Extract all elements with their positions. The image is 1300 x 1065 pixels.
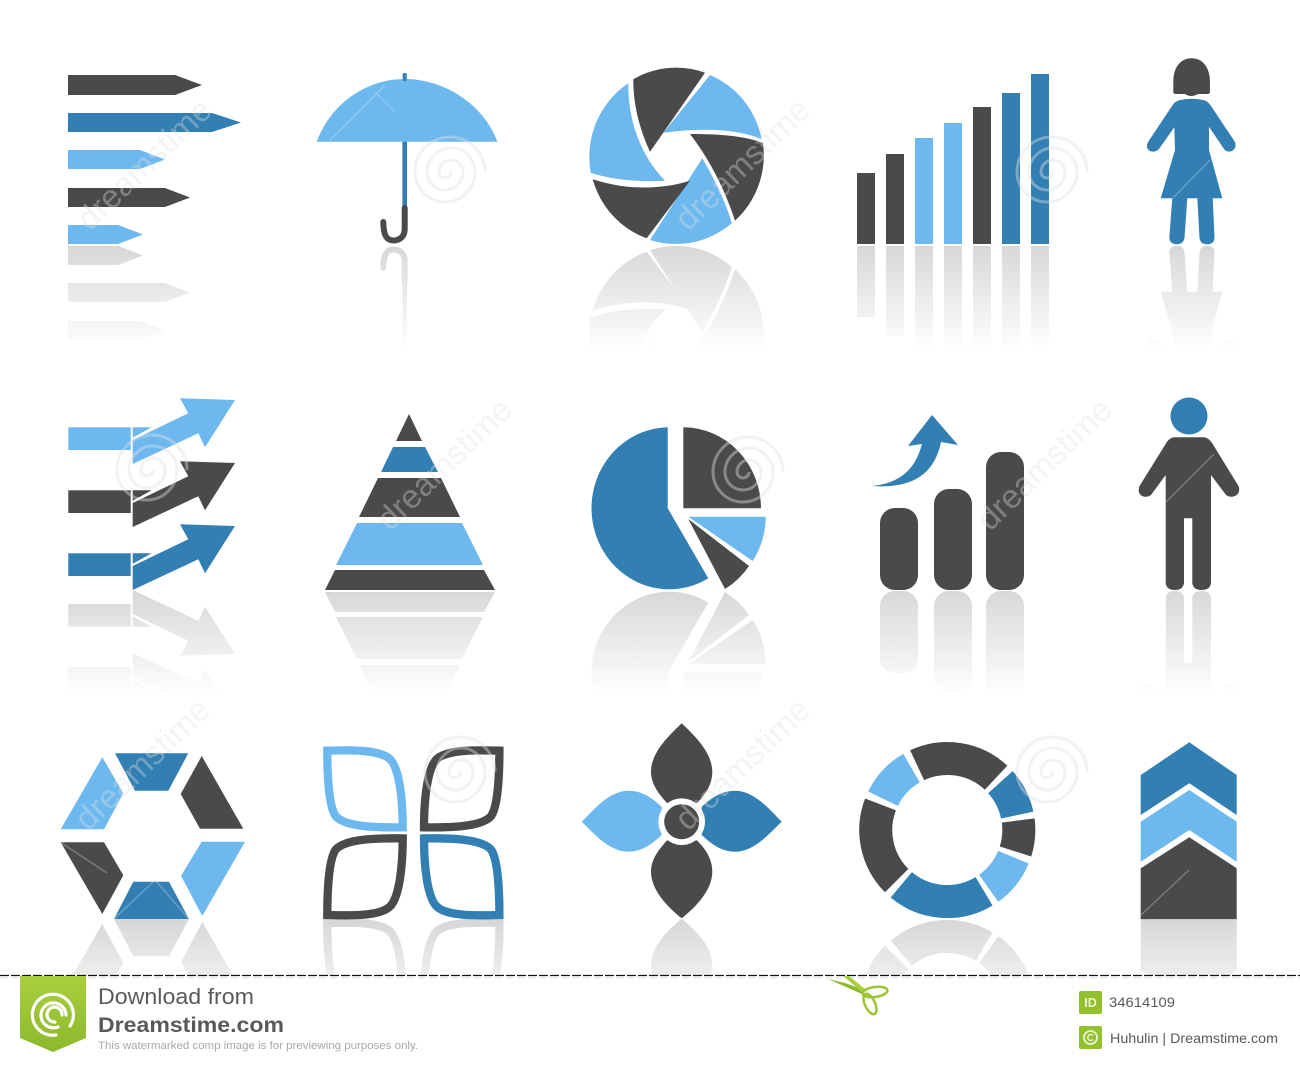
image id: ID bbox=[1084, 996, 1097, 1010]
icon: green scissors bbox=[828, 976, 888, 1016]
watermark overlay: dreamstime bbox=[67, 691, 217, 837]
watermark overlay: dreamstime bbox=[369, 391, 519, 537]
icon: four outlined leaves bbox=[327, 750, 499, 915]
icon: stacked chevrons bbox=[1141, 742, 1237, 919]
icon: layered pyramid bbox=[325, 414, 495, 590]
footer download text bbox=[98, 984, 418, 1052]
icon: bars with upward arrows bbox=[68, 398, 235, 590]
watermark overlay: dreamstime bbox=[667, 91, 817, 237]
footer dashed cut line bbox=[0, 976, 1300, 978]
icon: exploded pie chart bbox=[592, 427, 766, 589]
watermark overlay: dreamstime bbox=[667, 691, 817, 837]
reflections: top row bbox=[68, 246, 1236, 432]
icon: umbrella bbox=[317, 73, 497, 240]
image id bbox=[1079, 991, 1175, 1014]
reflections: middle row bbox=[68, 590, 1239, 784]
watermark overlay bbox=[60, 85, 1214, 919]
green ribbon logo bbox=[20, 976, 86, 1052]
reflections: bottom row bbox=[73, 919, 1237, 976]
dark arrow bar bbox=[68, 461, 235, 527]
icon: woman figure bbox=[1147, 58, 1236, 244]
bottom row mirrored icons bbox=[73, 919, 1237, 976]
image credit bbox=[1079, 1026, 1278, 1049]
icon: shutter pie bbox=[589, 68, 764, 244]
icon: segmented hexagon bbox=[61, 753, 245, 919]
icon: horizontal pointed bars bbox=[68, 75, 241, 244]
icon: man figure bbox=[1139, 398, 1239, 590]
watermark overlay: dreamstime bbox=[969, 391, 1119, 537]
icon: segmented donut ring bbox=[876, 758, 1019, 902]
blue arrow bar bbox=[68, 524, 235, 590]
icon: growth bars with arrow bbox=[872, 415, 1024, 590]
footer download text: Dreamstime.com bbox=[98, 1014, 284, 1037]
footer background bbox=[0, 976, 1300, 1065]
image id: 34614109 bbox=[1109, 994, 1175, 1010]
light arrow bar bbox=[68, 398, 235, 464]
icon: rising bar chart bbox=[857, 74, 1049, 244]
icon: four-petal flower bbox=[582, 723, 782, 918]
footer download text: This watermarked comp image is for previewing purposes only. bbox=[98, 1040, 418, 1052]
image credit: Huhulin | Dreamstime.com bbox=[1110, 1030, 1278, 1046]
watermark overlay: dreamstime bbox=[69, 91, 219, 237]
footer download text: Download from bbox=[98, 984, 254, 1009]
